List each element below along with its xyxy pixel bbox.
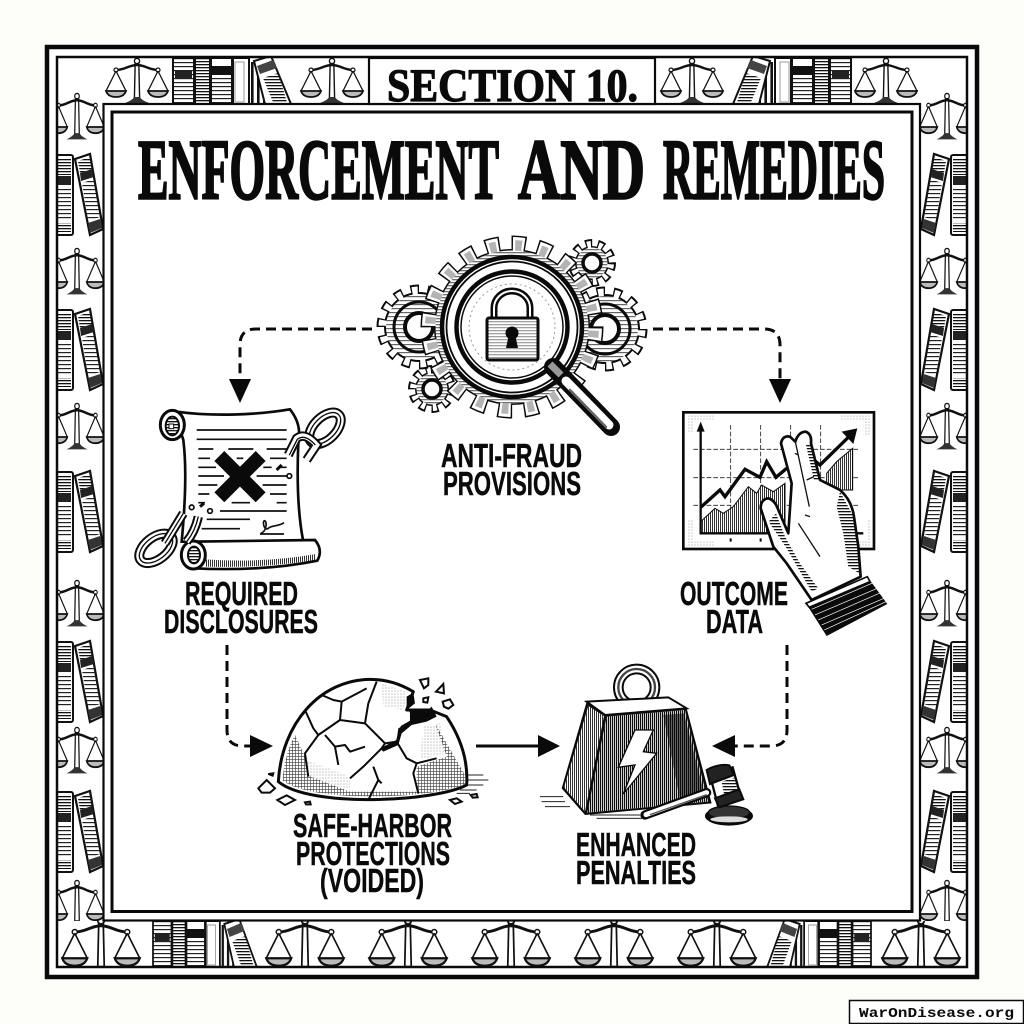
upper broken chain xyxy=(277,407,346,478)
hand xyxy=(761,432,861,600)
label: safe-harbor protections (voided): (VOIDED) xyxy=(320,862,424,899)
watermark badge xyxy=(850,1000,1024,1024)
small lower gear xyxy=(414,371,450,407)
magnifier lens xyxy=(442,257,582,397)
arrow: anti-fraud to required disclosures xyxy=(229,329,372,403)
icon: voided scroll with broken chains xyxy=(134,407,346,569)
label: safe-harbor protections (voided): SAFE-HARBOR xyxy=(293,807,452,844)
deep dark crack xyxy=(380,693,437,752)
arrow: outcome data to enhanced penalties xyxy=(712,645,787,757)
document text lines xyxy=(197,430,287,529)
top border band: scales and books xyxy=(106,56,917,104)
scroll paper xyxy=(176,409,303,542)
label: safe-harbor protections (voided) xyxy=(293,807,452,899)
chart axes xyxy=(697,422,863,542)
gavel xyxy=(645,765,753,826)
label: outcome data: DATA xyxy=(706,603,763,640)
chart gridlines xyxy=(693,425,860,533)
ground lines xyxy=(457,775,488,793)
icon: cracked safe-harbor dome xyxy=(258,678,488,805)
section heading box: SECTION 10. xyxy=(387,60,638,112)
label: enhanced penalties: PENALTIES xyxy=(576,854,696,891)
finger divider and knuckle marks xyxy=(795,442,820,557)
label: enhanced penalties xyxy=(576,826,696,891)
weight body xyxy=(562,697,712,815)
label: required disclosures xyxy=(164,575,318,640)
arrow: required disclosures to safe-harbor xyxy=(227,645,273,757)
bottom roll xyxy=(181,540,320,569)
label: outcome data xyxy=(680,575,788,640)
left border band: scales and books xyxy=(58,92,102,921)
large X xyxy=(219,456,261,497)
dome cracks xyxy=(305,682,437,800)
ground lines xyxy=(540,797,643,818)
chart frame xyxy=(683,412,874,549)
watermark badge: WarOnDisease.org xyxy=(859,1006,1014,1022)
label: required disclosures: REQUIRED xyxy=(185,575,298,612)
signature xyxy=(260,521,284,534)
dome crosshatch shading xyxy=(283,723,465,796)
label: enhanced penalties: ENHANCED xyxy=(576,826,696,863)
label: required disclosures: DISCLOSURES xyxy=(164,603,318,640)
dome body xyxy=(278,679,467,800)
label: anti-fraud provisions xyxy=(441,437,582,502)
shirt cuff xyxy=(806,577,887,636)
bottom border band: scales and books xyxy=(58,921,966,966)
icon: chart with hand xyxy=(683,412,887,636)
lower broken chain xyxy=(134,503,212,569)
icon: weight with lightning bolt and gavel xyxy=(540,669,753,826)
rising trend line xyxy=(701,428,857,507)
lightning bolt xyxy=(618,730,657,794)
padlock xyxy=(487,291,538,360)
small upper gear xyxy=(574,245,610,281)
right border band: scales and books xyxy=(921,92,966,921)
arrow: safe-harbor to enhanced penalties xyxy=(476,735,560,757)
label: anti-fraud provisions: PROVISIONS xyxy=(443,465,581,502)
right gear xyxy=(569,293,641,365)
title: AND xyxy=(518,122,645,218)
hand shading xyxy=(769,443,859,592)
title: ENFORCEMENT xyxy=(138,122,499,218)
magnifier handle xyxy=(550,364,611,427)
area series xyxy=(701,448,853,533)
arrow: anti-fraud to outcome data xyxy=(653,329,791,403)
left gear xyxy=(383,291,455,363)
label: outcome data: OUTCOME xyxy=(680,575,788,612)
weight ring xyxy=(618,669,655,706)
chart stipple corners xyxy=(687,416,871,546)
top curl xyxy=(160,410,184,440)
label: anti-fraud provisions: ANTI-FRAUD xyxy=(441,437,582,474)
large central gear xyxy=(431,246,593,408)
label: safe-harbor protections (voided): PROTECTIONS xyxy=(296,835,450,872)
rubble xyxy=(258,678,478,805)
icon: gears, magnifier and padlock xyxy=(383,245,641,427)
